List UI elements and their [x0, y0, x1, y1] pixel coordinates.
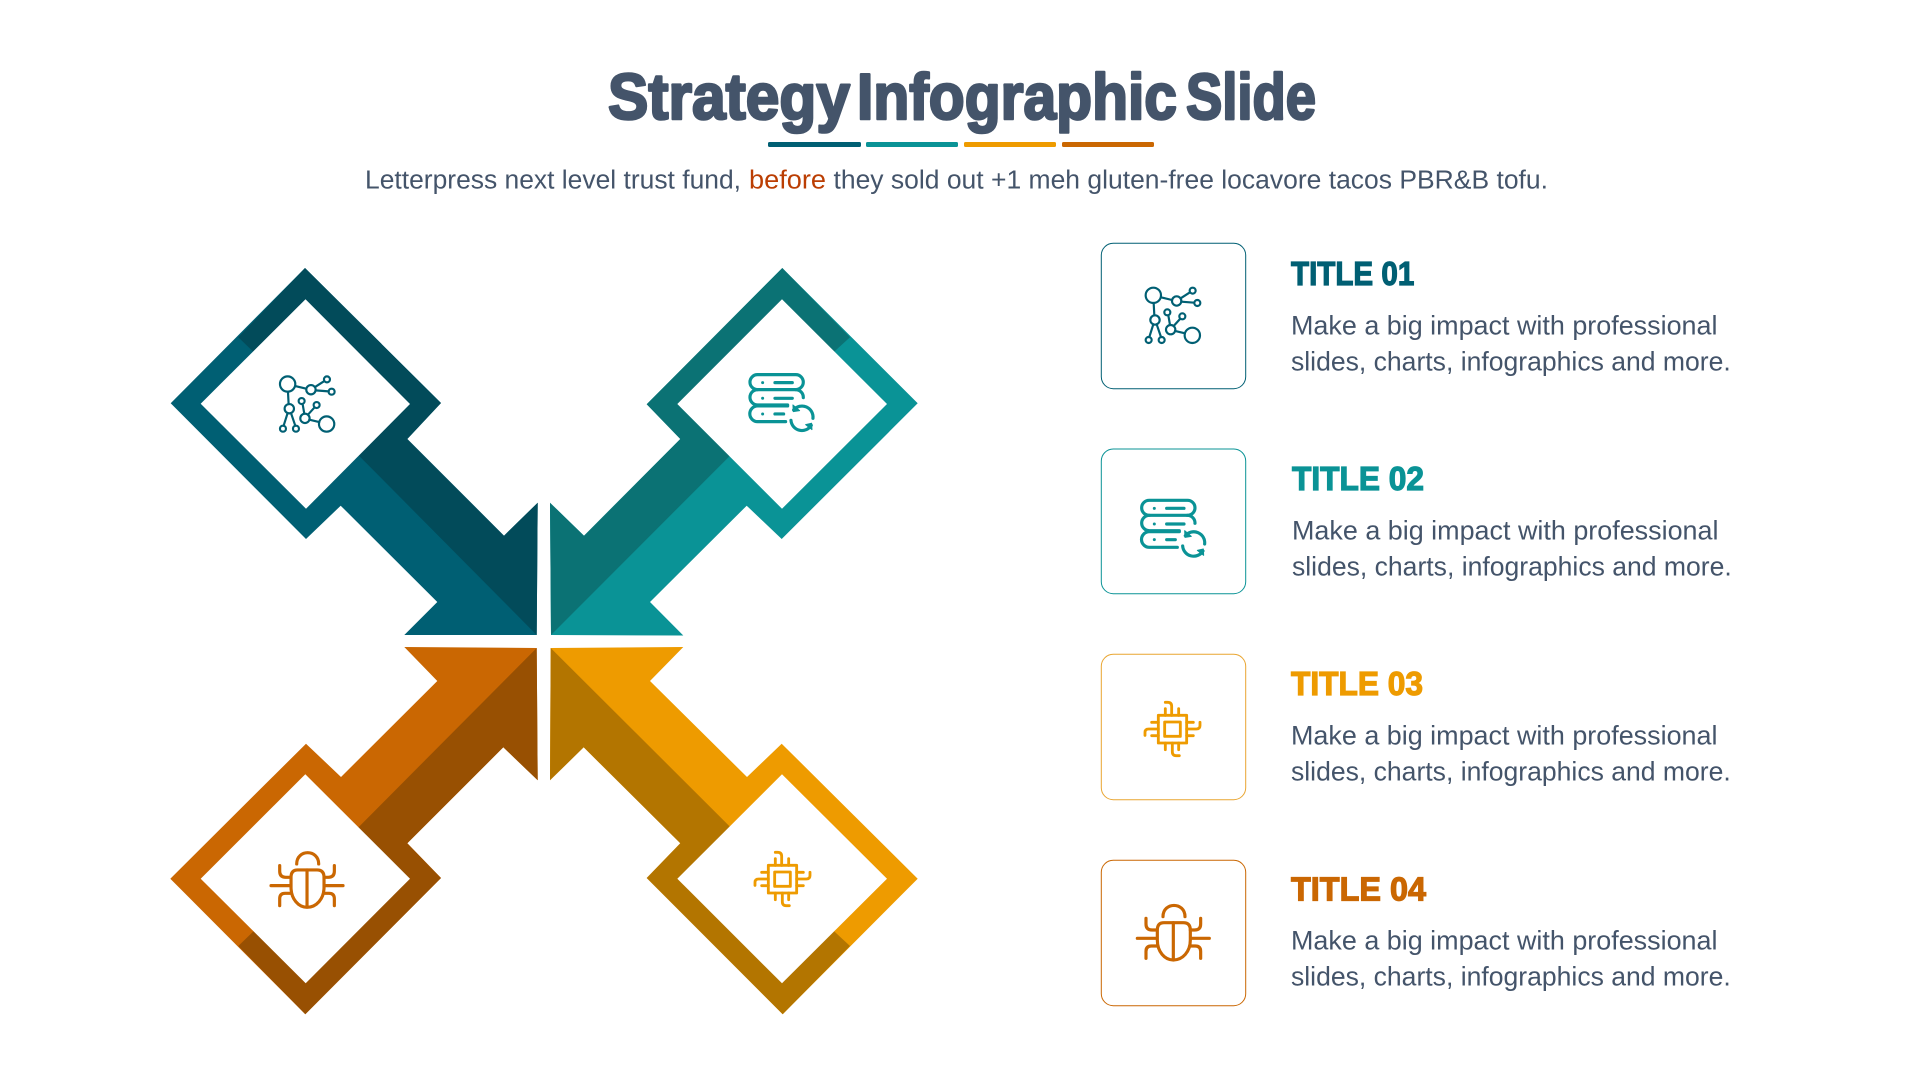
icon: server sync	[750, 375, 813, 431]
heading: title 01: TITLE 01	[1291, 255, 1414, 292]
arrow 4: bottom-left diamond and arrow	[170, 647, 538, 1014]
icon card 3	[1101, 654, 1246, 800]
subtitle	[365, 166, 1548, 194]
arrow 3: bottom-right diamond and arrow	[550, 647, 918, 1014]
heading: title 03: TITLE 03	[1291, 665, 1423, 702]
description 1: slides, charts, infographics and more.	[1291, 346, 1731, 376]
icon: network nodes	[1146, 288, 1200, 343]
description 4: Make a big impact with professional	[1291, 925, 1718, 955]
icon: microchip	[755, 852, 810, 906]
icon: bug	[271, 853, 343, 907]
title: Strategy	[608, 60, 850, 133]
description 4: slides, charts, infographics and more.	[1291, 961, 1731, 991]
list item 1	[1101, 243, 1731, 389]
heading: title 02: TITLE 02	[1292, 460, 1424, 497]
icon card 4	[1101, 860, 1246, 1006]
list item 2	[1101, 449, 1732, 594]
description 1: Make a big impact with professional	[1291, 310, 1718, 340]
subtitle: they sold out +1 meh gluten-free locavore tacos PBR&B tofu.	[834, 166, 1548, 194]
description 3	[1291, 720, 1731, 786]
icon card 2	[1101, 449, 1246, 594]
list item 3	[1101, 654, 1731, 800]
title: Slide	[1186, 60, 1316, 133]
title underline: four coloured segments	[768, 142, 1154, 147]
arrow 1: top-left diamond and arrow	[171, 268, 538, 635]
arrow diagram	[170, 268, 918, 1014]
icon: network nodes	[280, 376, 335, 432]
icon: bug	[1137, 905, 1209, 960]
list item 4	[1101, 860, 1731, 1006]
description 2: slides, charts, infographics and more.	[1292, 551, 1732, 581]
title	[608, 60, 1316, 133]
icon card 1	[1101, 243, 1246, 389]
description 2	[1292, 515, 1732, 581]
description 1	[1291, 310, 1731, 376]
subtitle: before	[749, 166, 826, 194]
icon: server sync	[1141, 500, 1205, 556]
description 4	[1291, 925, 1731, 991]
description 3: Make a big impact with professional	[1291, 720, 1718, 750]
heading: title 04: TITLE 04	[1291, 870, 1427, 908]
subtitle: Letterpress next level trust fund,	[365, 166, 741, 194]
title: Infographic	[857, 60, 1177, 133]
description 3: slides, charts, infographics and more.	[1291, 756, 1731, 786]
icon: microchip	[1145, 702, 1200, 756]
description 2: Make a big impact with professional	[1292, 515, 1718, 545]
arrow 2: top-right diamond and arrow	[550, 268, 918, 636]
